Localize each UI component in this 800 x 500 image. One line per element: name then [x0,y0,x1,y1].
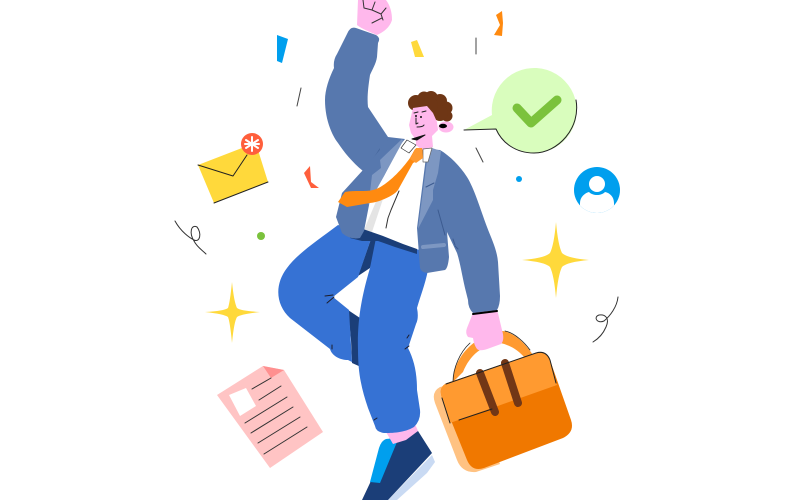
sock [386,424,418,444]
speech bubble with check [464,68,577,153]
star right [522,222,589,298]
jacket right panel and sleeve [417,149,500,313]
star left [205,282,260,343]
trousers dark shading [348,310,361,367]
collar [401,140,416,153]
ear [438,122,454,132]
back leg [278,225,372,362]
confetti pieces [257,11,522,240]
illustration: jumping businessman [174,0,620,500]
decorative swirl left [175,221,206,254]
bag body [441,352,572,469]
fist [357,0,392,35]
standing leg [358,238,428,433]
icon: profile [574,167,620,215]
jacket left panel [336,139,403,238]
bag handle [453,331,533,382]
shirt [364,140,429,250]
neck and head [409,106,438,150]
bag back panel [434,380,500,472]
jacket waist shadow [350,229,417,254]
hair [408,91,452,122]
icon: envelope [198,133,268,203]
icon: document [217,366,323,468]
raised arm [325,28,405,171]
arm shading [363,148,380,171]
tie [338,148,423,207]
fold marks [325,295,409,420]
face details [414,111,426,127]
decorative swirl right [593,297,618,342]
shoe [362,431,435,500]
hand with bag [466,309,503,350]
figure: businessman [278,0,572,500]
